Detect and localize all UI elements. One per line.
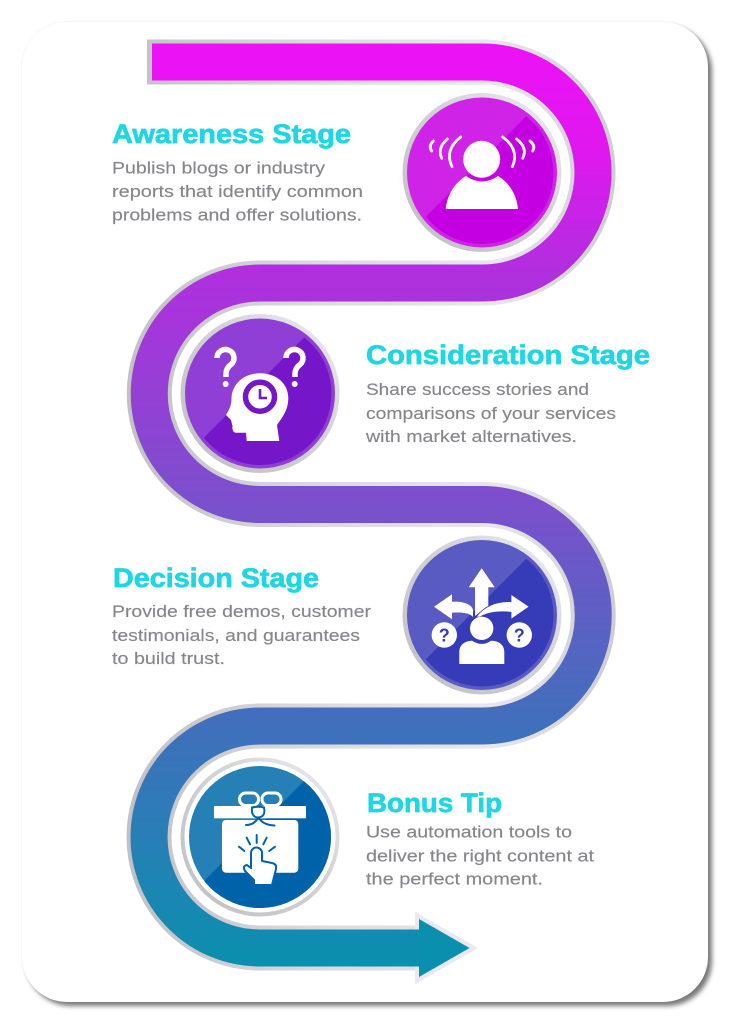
body: decision stage description: Provide free demos, customer [112,602,371,621]
body: consideration stage description: comparisons of your services [366,404,616,423]
icon: person choosing between arrows: ? [439,626,450,646]
heading: decision stage: Decision Stage [113,563,319,593]
text block: bonus tip [366,788,594,888]
body: consideration stage description [365,380,616,446]
body: decision stage description: to build trust. [112,649,225,668]
body: bonus tip description: the perfect moment. [366,870,543,888]
text block: consideration stage [365,340,650,446]
body: awareness stage description: Publish blogs or industry [112,158,326,178]
arrow head border [415,912,478,984]
infographic canvas [112,40,650,984]
body: bonus tip description: Use automation tools to [366,822,572,842]
arrow head [419,919,470,977]
body: awareness stage description: problems and offer solutions. [112,206,362,224]
icon: person with sound waves [430,137,534,209]
heading: bonus tip: Bonus Tip [367,788,502,818]
icon: bonus badge [180,758,340,916]
body: consideration stage description: Share success stories and [366,380,589,399]
icon: decision badge [402,536,562,694]
road fill [149,62,593,948]
text block: awareness stage [112,119,363,224]
road border [147,62,593,948]
winding road path with arrow [147,62,593,984]
body: bonus tip description: deliver the right content at [366,846,594,866]
icon: person choosing between arrows [432,568,532,664]
icon: head with clock and question marks [217,350,303,441]
heading: consideration stage: Consideration Stage [366,340,650,370]
body: decision stage description: testimonials, and guarantees [112,626,360,645]
body: decision stage description [112,602,371,668]
icon: person choosing between arrows: ? [514,626,525,646]
heading: awareness stage: Awareness Stage [112,119,351,149]
icon: gift box with pointing hand [214,793,306,885]
text block: decision stage [112,563,371,668]
icon: awareness badge [402,93,562,252]
icon: consideration badge [180,314,340,473]
body: consideration stage description: with market alternatives. [365,427,577,446]
body: awareness stage description: reports that identify common [112,182,363,201]
body: bonus tip description [366,822,594,888]
body: awareness stage description [112,158,363,224]
